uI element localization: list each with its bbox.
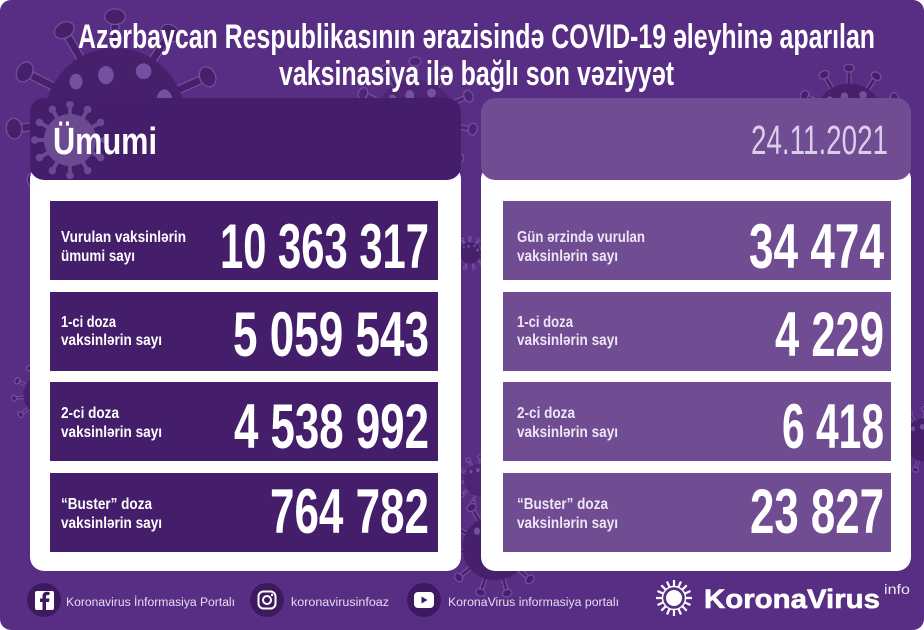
icon: virus top right bbox=[795, 64, 903, 171]
row: daily vaccinations: vaksinlərin sayı bbox=[517, 248, 618, 265]
row: first dose daily: 1-ci doza bbox=[517, 314, 573, 331]
row: first dose total: 5 059 543 bbox=[233, 300, 429, 370]
row: second dose total: 2-ci doza bbox=[61, 405, 119, 422]
footer: youtube link bbox=[407, 583, 619, 617]
icon: virus top centre bbox=[352, 57, 478, 182]
panel: right daily bbox=[481, 165, 911, 571]
row: booster daily bbox=[503, 473, 891, 552]
icon: virus top left bbox=[5, 9, 224, 226]
row: second dose total: 4 538 992 bbox=[234, 392, 429, 462]
panel: left total bbox=[30, 165, 461, 571]
row: daily vaccinations bbox=[503, 201, 891, 282]
row: total vaccinations: Vurulan vaksinlərin bbox=[61, 229, 186, 246]
row: first dose daily: vaksinlərin sayı bbox=[517, 332, 618, 349]
footer: KoronaVirus logo: KoronaVirus bbox=[704, 584, 880, 614]
icon: virus left edge bbox=[11, 361, 79, 428]
footer: facebook link: Koronavirus İnformasiya Portalı bbox=[66, 596, 235, 609]
title: vaksinasiya ilə bağlı son vəziyyət bbox=[279, 55, 674, 93]
footer: instagram link bbox=[250, 583, 389, 617]
row: first dose daily bbox=[503, 292, 891, 371]
row: second dose daily: vaksinlərin sayı bbox=[517, 424, 618, 441]
icon: sun logo bbox=[656, 580, 692, 616]
footer: facebook link bbox=[27, 583, 235, 617]
row: second dose total bbox=[50, 382, 438, 462]
row: first dose total: vaksinlərin sayı bbox=[61, 332, 162, 349]
icon: virus right edge bbox=[891, 406, 924, 473]
row: booster total: 764 782 bbox=[270, 477, 429, 547]
footer: youtube link: KoronaVirus informasiya portalı bbox=[448, 597, 619, 609]
row: booster daily: vaksinlərin sayı bbox=[517, 515, 618, 532]
row: second dose daily: 2-ci doza bbox=[517, 405, 575, 422]
row: booster total bbox=[50, 473, 438, 552]
panel: right header with date bbox=[481, 98, 911, 180]
row: second dose total: vaksinlərin sayı bbox=[61, 424, 162, 441]
row: second dose daily bbox=[503, 382, 891, 462]
row: booster total: “Buster” doza bbox=[61, 496, 152, 513]
row: first dose total bbox=[50, 292, 438, 371]
footer: instagram link: koronavirusinfoaz bbox=[291, 597, 389, 609]
row: total vaccinations: 10 363 317 bbox=[220, 212, 429, 282]
row: booster total: vaksinlərin sayı bbox=[61, 515, 162, 532]
footer: KoronaVirus logo bbox=[656, 580, 910, 616]
footer: KoronaVirus logo: info bbox=[884, 582, 910, 597]
row: first dose total: 1-ci doza bbox=[61, 314, 116, 331]
row: daily vaccinations: Gün ərzində vurulan bbox=[517, 229, 645, 246]
row: total vaccinations: ümumi sayı bbox=[61, 248, 135, 265]
icon: virus between panels lower bbox=[455, 455, 505, 505]
row: booster daily: “Buster” doza bbox=[517, 496, 608, 513]
panel: left header bbox=[30, 98, 461, 180]
title bbox=[78, 18, 875, 93]
row: total vaccinations bbox=[50, 201, 438, 282]
icon: virus between panels upper bbox=[453, 236, 487, 270]
panel: left header: Ümumi bbox=[53, 120, 157, 163]
icon: virus bottom centre bbox=[444, 498, 546, 598]
